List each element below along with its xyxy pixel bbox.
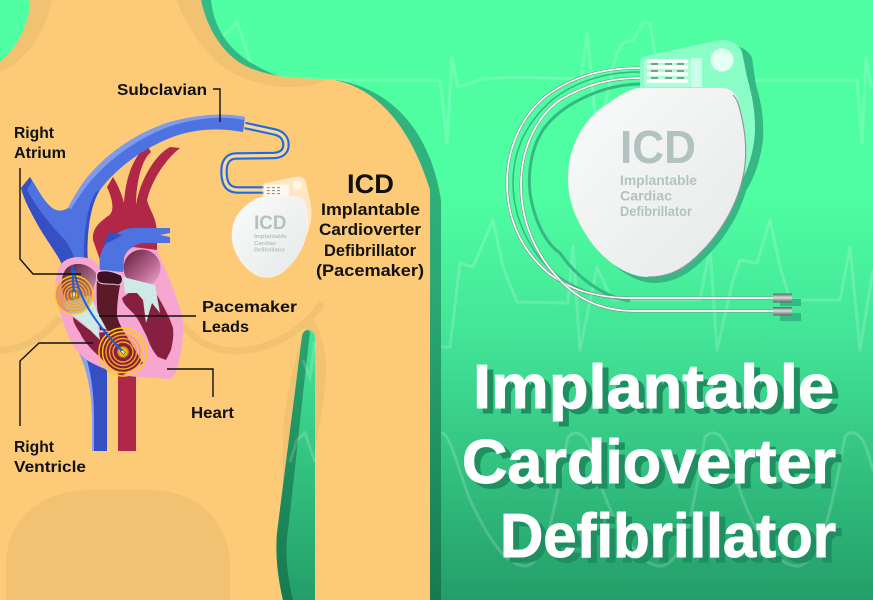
target rings ventricle (99, 328, 147, 376)
pulmonary opening (97, 271, 122, 285)
ICD caption: Implantable (321, 201, 420, 219)
superior vena cava and subclavian vein (21, 115, 245, 265)
armpit gap (276, 330, 315, 600)
anatomy labels: Atrium (14, 145, 66, 162)
main title (462, 353, 842, 576)
blue lead wire (224, 126, 286, 190)
lead wires (507, 68, 773, 311)
title shadow (468, 358, 842, 576)
left ventricle muscle (122, 290, 173, 360)
chest contour lines (0, 303, 322, 351)
aortic arch (100, 228, 170, 272)
small device label: Cardiac (254, 241, 277, 247)
anatomy labels: Pacemaker (202, 299, 297, 316)
small device label (254, 212, 287, 253)
header (640, 40, 755, 180)
anatomy labels: Heart (191, 405, 235, 422)
ICD caption: ICD (347, 169, 394, 199)
descending aorta (118, 365, 136, 451)
aorta and branches (93, 145, 180, 260)
device label: Cardiac (620, 188, 673, 204)
ICD caption: (Pacemaker) (316, 262, 424, 280)
small device label: Defibrillator (254, 247, 285, 253)
title shadow: Defibrillator (506, 507, 842, 576)
left atrium chamber (124, 250, 160, 286)
anatomy labels: Right (14, 125, 55, 142)
case (568, 88, 746, 277)
device label: Implantable (620, 173, 698, 188)
anatomy labels (14, 82, 297, 476)
target rings atrium (55, 276, 93, 314)
heart anatomy illustration (21, 115, 245, 451)
title text (462, 353, 836, 571)
pulmonary outflow tube (97, 280, 124, 332)
title shadow: Implantable (479, 358, 840, 427)
small device label: ICD (254, 212, 286, 234)
heartbeat line pattern (220, 22, 873, 566)
small ICD device (232, 177, 311, 277)
device label (620, 121, 698, 219)
heart muscle wall (55, 247, 183, 379)
neck and left shoulder shading (0, 0, 328, 600)
anatomy labels: Leads (202, 319, 249, 336)
vein light edge (68, 115, 245, 209)
lead shadows (513, 72, 640, 301)
ICD caption: Cardioverter (319, 221, 422, 239)
anatomy labels: Subclavian (117, 82, 207, 99)
title text: Defibrillator (500, 502, 836, 571)
lead tips (72, 292, 125, 354)
body shadow edge (190, 0, 441, 600)
title text: Cardioverter (462, 428, 836, 497)
title shadow: Cardioverter (468, 433, 842, 502)
vein dark shading (21, 177, 100, 268)
body silhouette (0, 0, 430, 600)
lead connector tips (773, 294, 801, 321)
device label: ICD (620, 121, 696, 173)
anatomy labels: Ventricle (14, 459, 86, 476)
mitral valve strands (123, 277, 160, 323)
right atrium chamber (62, 264, 96, 300)
title text: Implantable (473, 353, 834, 422)
small device label: Implantable (254, 234, 287, 240)
anatomy labels: Right (14, 439, 55, 456)
ICD caption (316, 169, 424, 280)
large ICD device (507, 40, 801, 321)
inferior vena cava (63, 300, 107, 451)
device label: Defibrillator (620, 204, 693, 219)
right ventricle muscle (73, 317, 143, 375)
ICD caption: Defibrillator (324, 242, 417, 260)
pacemaker leads in heart (72, 265, 123, 352)
callout lines (20, 89, 220, 426)
header shadow (700, 44, 763, 200)
pulmonary vessel stub (102, 232, 122, 245)
small device case (232, 197, 307, 277)
case shadow (591, 92, 752, 283)
small device header (263, 177, 311, 236)
tricuspid valve strands (63, 295, 107, 340)
case edge (648, 95, 746, 277)
